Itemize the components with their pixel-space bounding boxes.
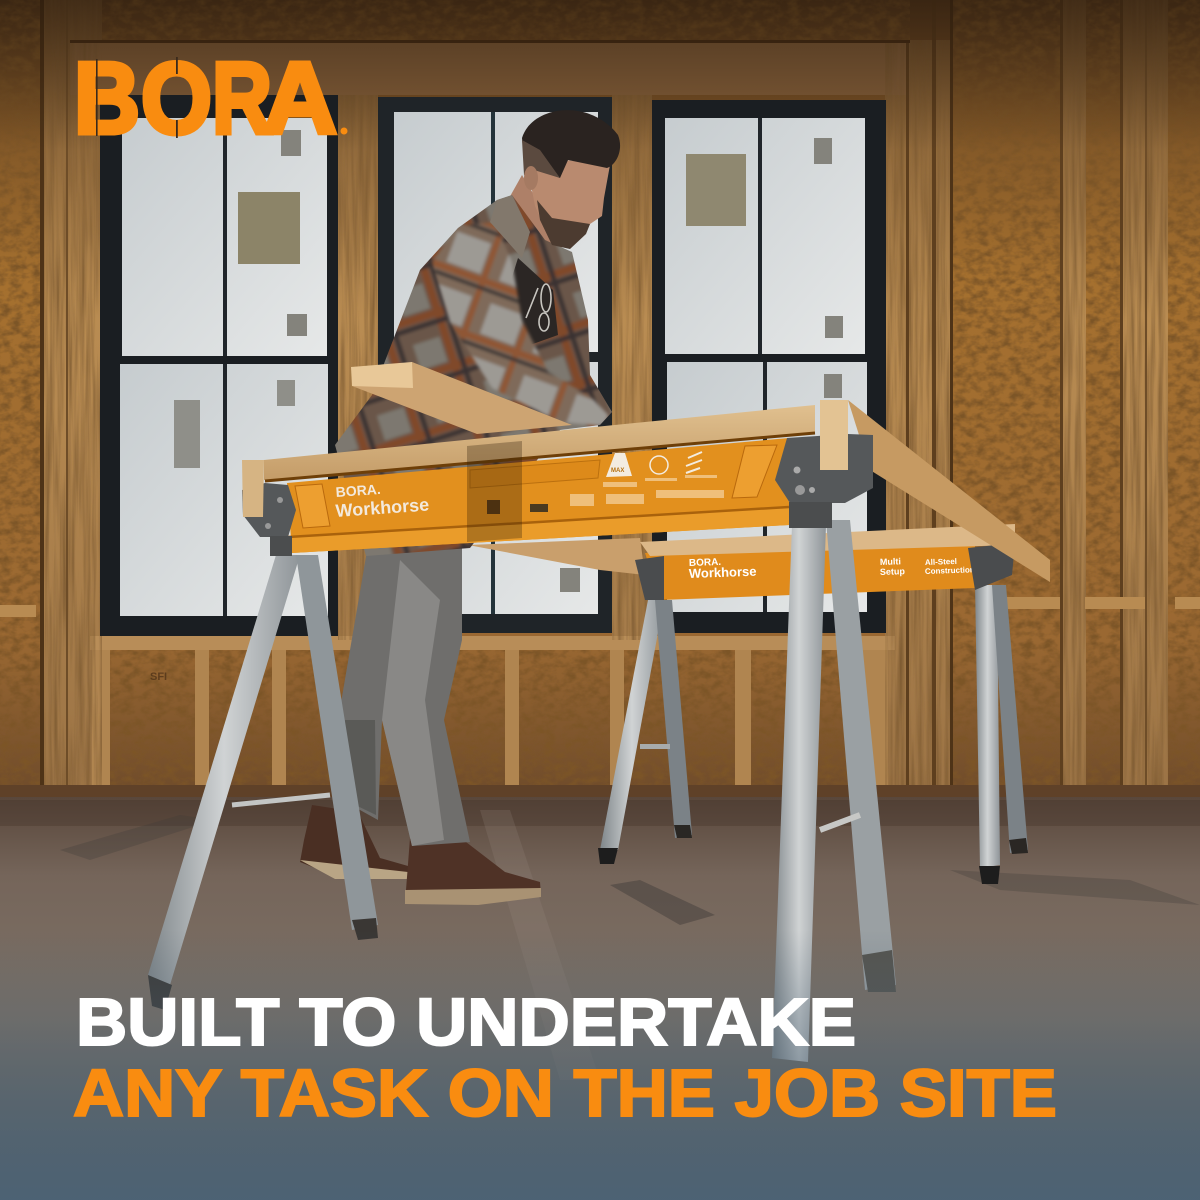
- bottom fade: [0, 930, 1200, 1200]
- headline: [73, 985, 1057, 1131]
- headline line 1: BUILT TO UNDERTAKE: [76, 985, 856, 1060]
- rear orange beam with label: Setup: [880, 566, 906, 577]
- wall background: [0, 0, 1200, 800]
- lumber: cross board: [351, 362, 572, 434]
- right legs: [772, 520, 896, 1062]
- sleeve: [432, 222, 613, 426]
- beard: [537, 200, 590, 249]
- floor: [0, 797, 1200, 1200]
- rear orange beam with label: Construction: [925, 565, 975, 576]
- window: left: [100, 95, 338, 636]
- man's shadow on beam: [467, 441, 522, 542]
- rear orange beam with label: Multi: [880, 556, 901, 567]
- wall background: SFI: [150, 671, 167, 683]
- BORA logo: A: [263, 43, 337, 155]
- trousers: [338, 545, 470, 846]
- brackets: [242, 400, 873, 556]
- rear orange beam with label: All-Steel: [925, 557, 957, 567]
- head: [522, 110, 620, 249]
- boots: [300, 805, 541, 905]
- BORA logo: R: [212, 43, 272, 155]
- window: middle: [378, 97, 612, 633]
- rear legs: [598, 585, 1028, 884]
- orange beam with label: BORA.: [335, 481, 381, 500]
- rear orange beam with label: Workhorse: [689, 564, 757, 581]
- left legs: [148, 555, 378, 1010]
- face: [528, 160, 610, 248]
- orange beam with label: [242, 400, 873, 556]
- rear orange beam with label: BORA.: [689, 557, 722, 569]
- orange beam with label: Workhorse: [335, 495, 430, 521]
- long lumber: [264, 400, 1050, 582]
- label icons: [487, 452, 724, 514]
- headline line 2: ANY TASK ON THE JOB SITE: [73, 1056, 1057, 1131]
- front sawhorse: [148, 400, 1050, 1062]
- window: right: [652, 100, 886, 633]
- collar: [490, 195, 530, 258]
- man: [300, 110, 620, 905]
- plaid shirt: [328, 190, 620, 562]
- BORA logo: B: [74, 43, 140, 155]
- neck: [508, 175, 562, 258]
- ear: [524, 166, 538, 190]
- label icons: MAX: [611, 468, 624, 474]
- hair: [522, 110, 620, 178]
- rear orange beam with label: [468, 524, 1015, 600]
- BORA logo: [74, 43, 348, 155]
- sunglasses: [526, 284, 551, 331]
- rear sawhorse: [468, 524, 1028, 884]
- BORA logo: O: [141, 43, 212, 155]
- windows: [100, 95, 886, 636]
